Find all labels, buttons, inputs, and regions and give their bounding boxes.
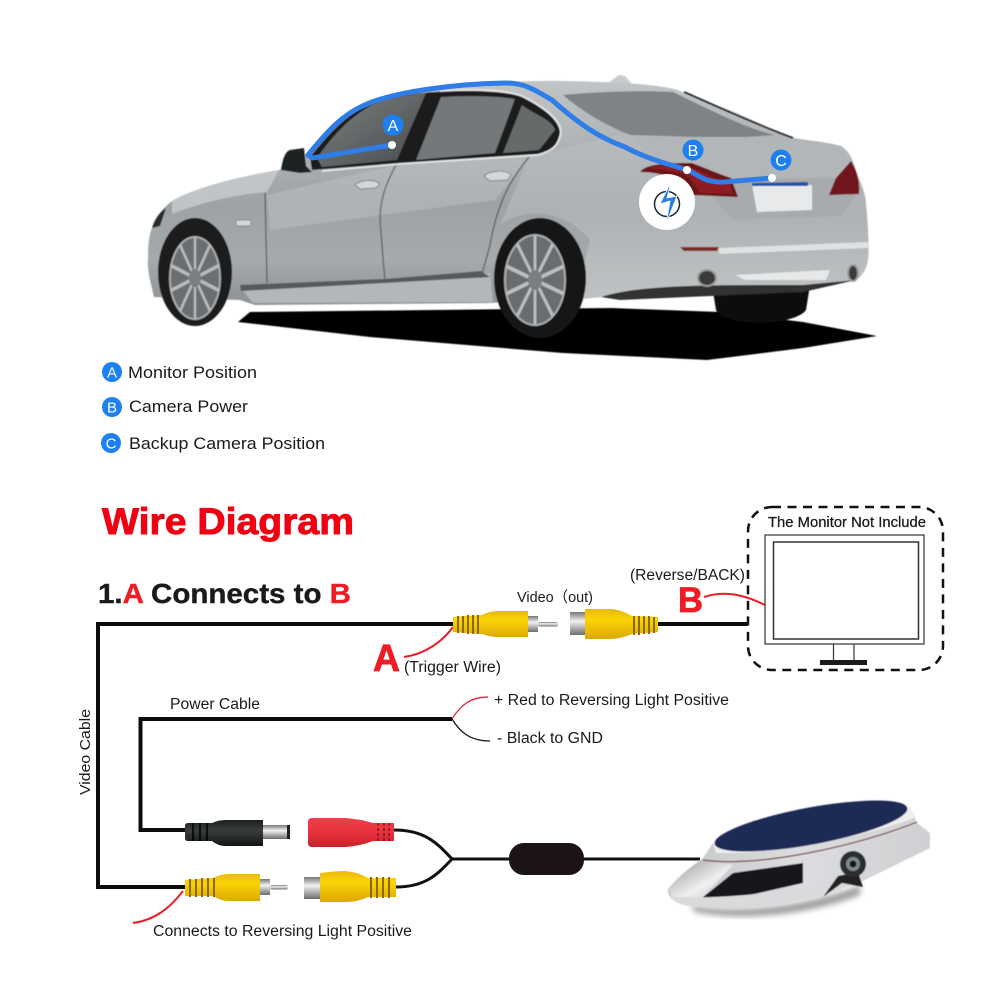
- navy top: [711, 790, 911, 862]
- blue cable route: [308, 83, 772, 182]
- car body: [148, 81, 868, 305]
- door mid shading: [267, 157, 529, 230]
- monitor label: The Monitor Not Include: [768, 515, 926, 531]
- monitor frame: [765, 535, 924, 644]
- RCA female connector top: [570, 609, 658, 639]
- mirror: [281, 148, 312, 173]
- taillight glow: [648, 165, 733, 194]
- hood highlight: [172, 170, 279, 214]
- DC socket red: [308, 818, 394, 847]
- output wire to monitor: [658, 622, 748, 626]
- front wheel: [170, 237, 220, 319]
- dashed outline: [748, 507, 943, 670]
- lower bumper dark: [601, 280, 856, 300]
- route marker A: [382, 114, 404, 149]
- heading: A connects to B: 1.A Connects to B: [98, 578, 351, 609]
- antenna: [608, 75, 632, 84]
- sill shadow: [240, 271, 490, 291]
- rear windscreen edge: [684, 92, 793, 138]
- license plate: [752, 185, 812, 212]
- rear wheel arch: [494, 218, 586, 338]
- red pointer A: [404, 627, 453, 657]
- handles: [355, 171, 511, 189]
- label: connects to reversing: Connects to Reversing Light Positive: [153, 923, 412, 940]
- monitor stand: [820, 644, 867, 665]
- legend item A: Monitor Position: [128, 363, 257, 382]
- headlight: [152, 208, 166, 228]
- plate blue strip: [752, 182, 808, 186]
- window trim: [322, 90, 561, 171]
- upper ring: [713, 803, 914, 853]
- far rear wheel: [712, 285, 810, 323]
- RCA male connector bottom: [185, 874, 288, 901]
- rear wheel: [505, 235, 565, 325]
- monitor group: [748, 507, 943, 670]
- video cable wire: [98, 624, 453, 887]
- legend item C: Backup Camera Position: [129, 434, 325, 453]
- legend item A: A: [107, 364, 117, 382]
- right taillight: [829, 161, 859, 195]
- route marker B: B: [688, 143, 698, 160]
- label: video cable: Video Cable: [77, 709, 94, 795]
- side vent: [236, 220, 251, 226]
- legend: [101, 362, 325, 453]
- big letter B: B: [678, 581, 703, 620]
- lower bumper highlight: [735, 270, 830, 280]
- power branch red: [452, 697, 488, 719]
- heading: Wire Diagram: Wire Diagram: [102, 501, 354, 542]
- label: red to reversing: + Red to Reversing Light Positive: [494, 692, 729, 709]
- bumper strip: [719, 242, 868, 254]
- label: black to GND: - Black to GND: [497, 730, 603, 747]
- power branch black: [452, 719, 490, 741]
- rear quarter panel: [500, 130, 868, 300]
- lower lip: [670, 882, 842, 907]
- trunk lid: [630, 137, 851, 180]
- left taillight: [640, 163, 738, 197]
- Y split cable: [394, 830, 700, 887]
- front window: [317, 93, 426, 167]
- rear quarter window: [503, 105, 555, 153]
- route marker A: A: [388, 118, 399, 135]
- rear windscreen: [563, 91, 775, 138]
- lens: [823, 851, 866, 897]
- front wheel arch: [158, 218, 232, 326]
- chrome seam: [703, 822, 917, 862]
- red pointer bottom: [133, 891, 183, 923]
- chrome base: [668, 803, 930, 908]
- camera: [668, 790, 930, 917]
- inline module: [509, 843, 584, 875]
- camera shadow: [690, 885, 860, 917]
- ground shadow: [238, 308, 877, 360]
- car photo: [148, 75, 877, 360]
- monitor screen: [774, 542, 918, 639]
- RCA male connector top: [453, 611, 558, 637]
- door seams: [265, 157, 529, 283]
- nose shine: [668, 860, 733, 898]
- red pointer B: [704, 594, 765, 605]
- window band: [310, 91, 560, 170]
- route marker B: [682, 140, 704, 174]
- icon: power bolt: [639, 174, 695, 230]
- RCA female connector bottom: [304, 871, 396, 902]
- label: video out: Video（out): [517, 589, 593, 606]
- label: trigger wire: (Trigger Wire): [404, 659, 501, 676]
- rocker sill: [241, 273, 493, 303]
- power cable wire: [140, 719, 452, 830]
- red reflector: [680, 247, 719, 251]
- label: reverse back: (Reverse/BACK): [630, 567, 745, 584]
- dark reflection: [702, 863, 803, 898]
- route marker C: C: [775, 153, 787, 170]
- exhaust left: [698, 270, 716, 286]
- plate recess: [700, 178, 856, 220]
- big letter A: A: [373, 638, 400, 680]
- DC plug black: [185, 820, 290, 846]
- label: power cable: Power Cable: [170, 696, 260, 713]
- exhaust right: [848, 265, 858, 281]
- rear door window: [416, 96, 515, 160]
- legend item B: B: [107, 400, 117, 416]
- route marker C: [768, 150, 792, 182]
- legend item B: Camera Power: [129, 397, 248, 416]
- legend item C: C: [106, 436, 117, 452]
